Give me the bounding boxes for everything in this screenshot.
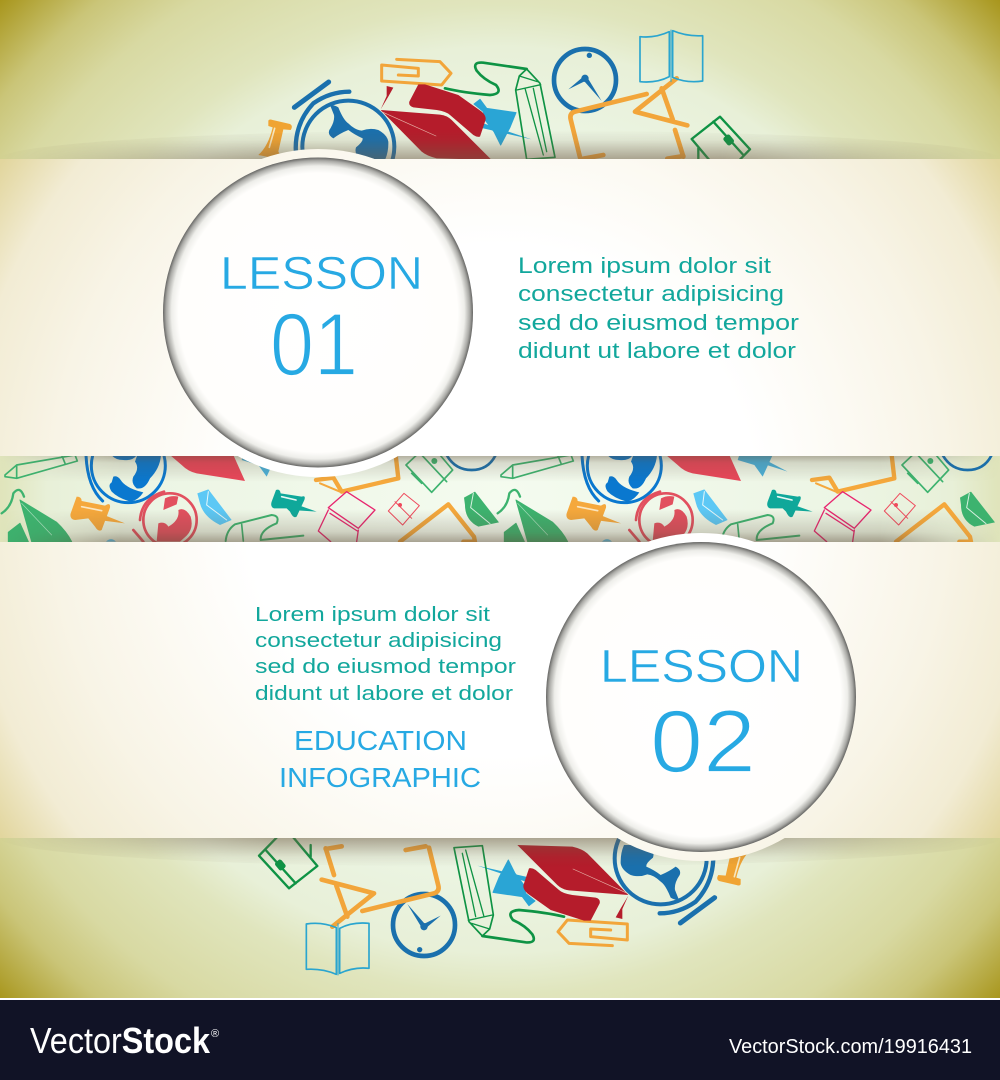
footer bar (0, 998, 1000, 1080)
panel: bottom band (0, 542, 1000, 838)
shadow below bottom panel (34, 838, 966, 862)
text block: lesson 01 description (518, 253, 799, 363)
heading: lesson 02: 02 (650, 691, 756, 791)
registered mark: ® (211, 1028, 219, 1040)
shadow above top panel (34, 135, 966, 159)
panel: top band (0, 159, 1000, 456)
text block: lesson 01 description: didunt ut labore et dolor (518, 338, 796, 363)
text block: lesson 01 description: consectetur adipisicing (518, 281, 784, 306)
title (279, 725, 481, 793)
icon stripe (0, 456, 995, 542)
footer image id: VectorStock.com/19916431 (729, 1036, 972, 1058)
lesson 01 circle (154, 149, 482, 477)
text block: lesson 02 description (255, 603, 516, 705)
heading: lesson 01 (220, 247, 423, 394)
heading: lesson 02 (600, 640, 803, 791)
title: INFOGRAPHIC (279, 762, 481, 793)
text block: lesson 02 description: Lorem ipsum dolor sit (255, 603, 490, 626)
bottom icon cluster (258, 838, 746, 976)
text block: lesson 02 description: consectetur adipisicing (255, 629, 502, 652)
text block: lesson 02 description: didunt ut labore et dolor (255, 682, 513, 705)
heading: lesson 01: 01 (270, 294, 358, 394)
text block: lesson 02 description: sed do eiusmod tempor (255, 655, 516, 678)
footer logo: VectorStock (30, 1020, 211, 1061)
heading: lesson 01: LESSON (220, 247, 423, 299)
top icon cluster (258, 30, 752, 159)
heading: lesson 02: LESSON (600, 640, 803, 692)
title: EDUCATION (294, 725, 467, 756)
text block: lesson 01 description: Lorem ipsum dolor sit (518, 253, 771, 278)
text block: lesson 01 description: sed do eiusmod tempor (518, 310, 799, 335)
lesson 02 circle (537, 533, 865, 861)
